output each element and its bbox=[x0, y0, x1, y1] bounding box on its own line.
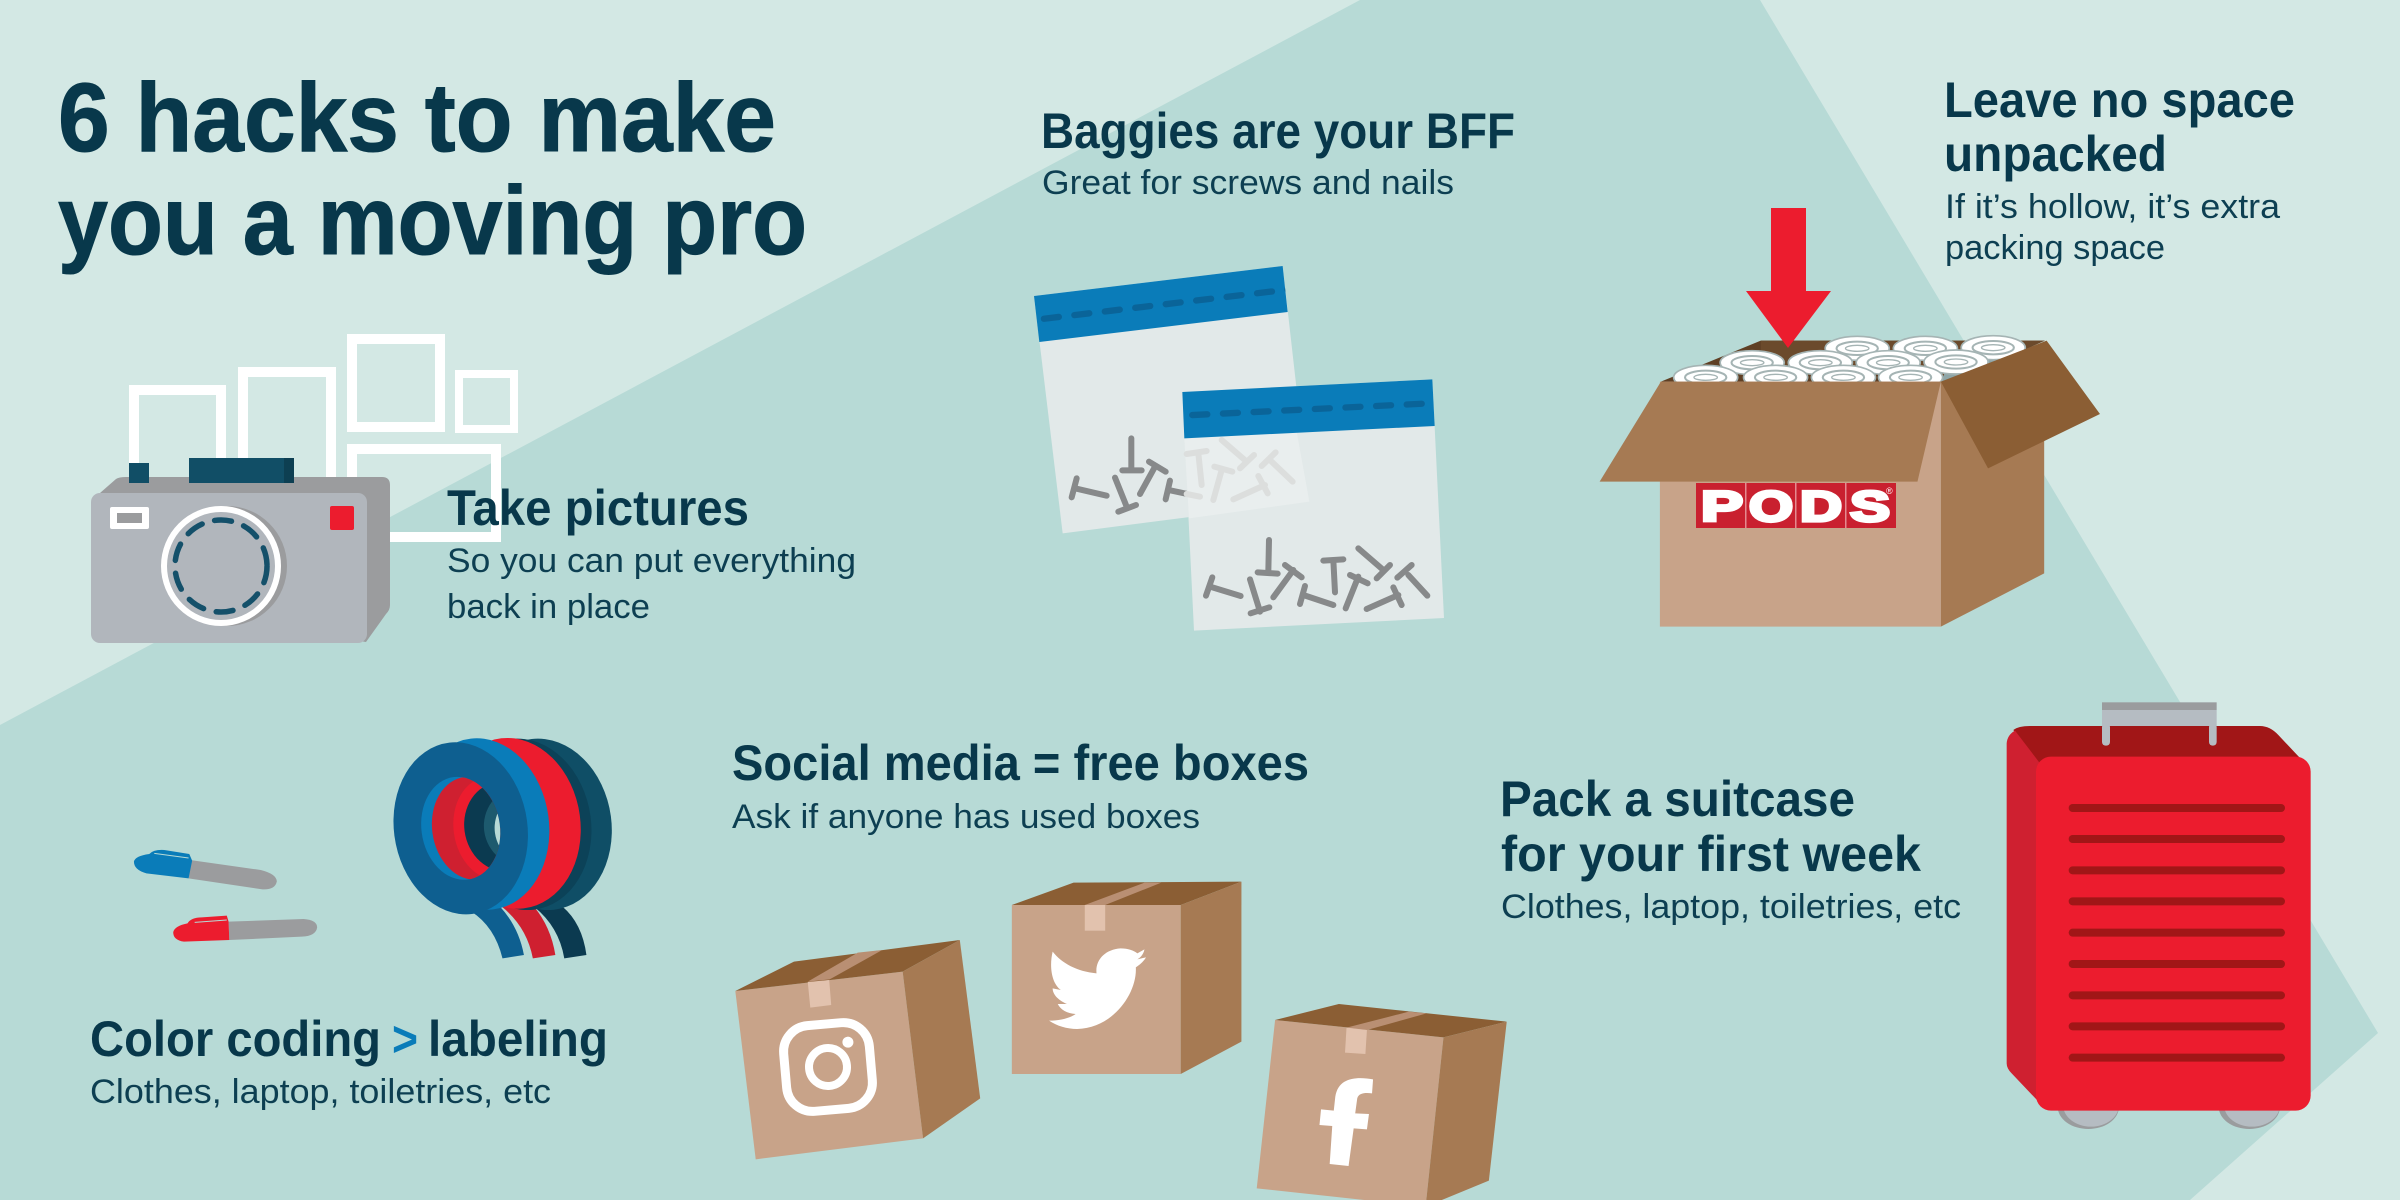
logo: PODS: D bbox=[1800, 483, 1842, 531]
heading: color coding > labeling: Color coding bbox=[90, 1011, 381, 1067]
text: take pictures description bbox=[447, 542, 856, 626]
icon: markers bbox=[134, 850, 317, 942]
title: 6 hacks to make bbox=[58, 63, 776, 172]
text: suitcase description: Clothes, laptop, toiletries, etc bbox=[1501, 888, 1961, 926]
text: leave no space description: If it’s hollow, it’s extra bbox=[1945, 188, 2280, 226]
heading: leave no space unpacked: Leave no space bbox=[1944, 72, 2295, 128]
icon: colored tape rolls bbox=[393, 738, 612, 958]
heading: leave no space unpacked: unpacked bbox=[1944, 126, 2167, 182]
panel: take pictures bbox=[91, 339, 856, 643]
panel: color coding bbox=[90, 731, 622, 1111]
logo: PODS: ® bbox=[1886, 486, 1893, 496]
text: baggies description: Great for screws and nails bbox=[1042, 164, 1454, 202]
icon: camera bbox=[91, 458, 390, 643]
panel: social media bbox=[732, 735, 1507, 1200]
title bbox=[58, 63, 807, 275]
icon: instagram box bbox=[735, 940, 980, 1159]
icon: picture frames bbox=[134, 339, 514, 537]
text: take pictures description: back in place bbox=[447, 588, 650, 626]
text: social media description: Ask if anyone has used boxes bbox=[732, 798, 1200, 836]
logo: PODS: O bbox=[1749, 483, 1793, 531]
heading: color coding > labeling: labeling bbox=[428, 1011, 608, 1067]
panel: baggies bbox=[1033, 103, 1515, 631]
heading: color coding > labeling bbox=[90, 1011, 608, 1067]
text: leave no space description bbox=[1945, 188, 2280, 267]
panel: pack a suitcase bbox=[1500, 702, 2311, 1129]
icon: facebook box bbox=[1257, 1004, 1507, 1200]
logo: PODS bbox=[1696, 483, 1896, 531]
title: you a moving pro bbox=[58, 166, 807, 275]
text: take pictures description: So you can put everything bbox=[447, 542, 856, 580]
heading: pack a suitcase: Pack a suitcase bbox=[1500, 771, 1855, 827]
text: leave no space description: packing space bbox=[1945, 229, 2165, 267]
icon: open PODS box with rolled towels bbox=[1600, 336, 2100, 627]
icon: twitter box bbox=[1012, 882, 1241, 1074]
icon: plastic bags with nails bbox=[1033, 266, 1444, 631]
panel: leave no space unpacked bbox=[1600, 72, 2295, 627]
heading: leave no space unpacked bbox=[1944, 72, 2295, 182]
heading: pack a suitcase bbox=[1500, 771, 1921, 882]
logo: PODS: P bbox=[1701, 483, 1743, 531]
heading: color coding > labeling: > bbox=[392, 1011, 418, 1067]
logo: PODS: S bbox=[1850, 483, 1890, 531]
text: color coding description: Clothes, laptop, toiletries, etc bbox=[90, 1073, 551, 1111]
heading: pack a suitcase: for your first week bbox=[1501, 826, 1921, 882]
icon: red suitcase bbox=[2007, 702, 2311, 1129]
heading: take pictures: Take pictures bbox=[447, 480, 749, 536]
heading: baggies: Baggies are your BFF bbox=[1041, 103, 1515, 159]
heading: social media: Social media = free boxes bbox=[732, 735, 1309, 791]
arrow: red down arrow bbox=[1746, 208, 1831, 348]
